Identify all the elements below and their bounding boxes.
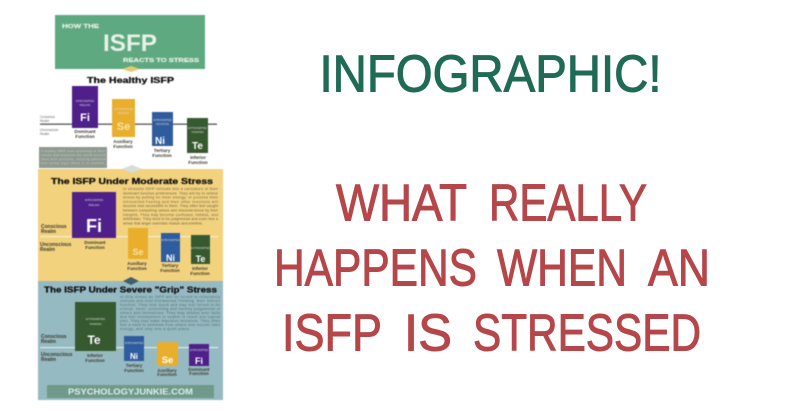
panel: healthy functions (40, 86, 217, 165)
title banner: ISFP (103, 30, 157, 57)
headline: what really happens (274, 174, 710, 362)
text block: grip stress description: energy, and step into a quiet place. (120, 327, 190, 331)
panel: healthy functions: Ni (155, 136, 165, 147)
text block: healthy description: values and explores the world around (41, 153, 105, 157)
panel: moderate stress: Function (160, 268, 180, 273)
panel: healthy functions: Realm (40, 119, 50, 123)
text block: moderate stress description: dominant function preferences. They will try to relieve (123, 191, 218, 195)
panel: healthy functions: INTROVERTED (76, 99, 94, 103)
panel: healthy functions: EXTRAVERTED (188, 126, 207, 130)
text block: grip stress description: others and themselves. They may obsess over facts (120, 311, 220, 315)
heading: The Healthy ISFP: The Healthy ISFP (87, 75, 174, 85)
panel: healthy functions: Function (113, 144, 133, 149)
panel: grip stress: Unconscious (41, 352, 73, 358)
panel: moderate stress: EXTRAVERTED (191, 246, 210, 250)
panel: moderate stress: INTROVERTED (85, 198, 103, 202)
panel: grip stress: Auxiliary (157, 368, 177, 373)
panel: grip stress: Conscious (41, 334, 67, 340)
panel: grip stress: Function (85, 358, 105, 363)
panel: healthy functions: THINKING (191, 130, 204, 134)
panel: moderate stress (38, 165, 223, 281)
panel: grip stress: Se (162, 355, 173, 366)
panel: healthy functions: Dominant (74, 129, 96, 134)
headline: what really happens: ISFP (282, 304, 382, 362)
panel: healthy functions: INTROVERTED (153, 118, 172, 122)
text block: grip stress description (120, 295, 221, 331)
text block: grip stress description: feel a need to withdraw from others and recover their (120, 323, 221, 327)
heading: moderate stress: The ISFP Under Moderate Stress (51, 176, 213, 186)
text block: grip stress description: overuse and trust Extraverted Thinking, their inferior (120, 299, 221, 303)
panel: grip stress: Te (87, 333, 101, 347)
panel: moderate stress: Se (132, 247, 144, 257)
panel: grip stress: EXTRAVERTED (86, 317, 105, 321)
headline: what really happens: STRESSED (473, 304, 701, 362)
panel: moderate stress: Tertiary (162, 263, 179, 268)
text block: grip stress description: plan. They may make impulsive decisions. They often (120, 319, 220, 323)
text block: healthy description: and using logic when it is needed. (41, 161, 105, 165)
panel: grip stress: Dominant (188, 367, 210, 372)
panel: grip stress: THINKING (89, 322, 102, 326)
infographic thumbnail (38, 15, 223, 400)
footer: website banner (47, 385, 214, 398)
marker: banner pointer (122, 66, 140, 72)
text block: grip stress description: and feel incompetent or unable to reach any logical (120, 315, 220, 319)
panel: moderate stress: Function (190, 271, 210, 276)
text block: moderate stress description: insights. They may become confused, listless, and (123, 213, 218, 217)
headline: what really happens: WHEN (497, 238, 627, 296)
panel: moderate stress: Realm (41, 229, 57, 235)
panel: healthy functions: SENSING (118, 111, 129, 115)
headline: what really happens: REALLY (489, 174, 647, 232)
panel: moderate stress: Function (85, 245, 105, 250)
heading: INFOGRAPHIC!: INFOGRAPHIC! (320, 44, 662, 102)
panel: grip stress: Function (124, 368, 144, 373)
panel: grip stress: Tertiary (126, 363, 143, 368)
panel: grip stress: Function (157, 372, 177, 377)
headline: what really happens: AN (648, 238, 710, 296)
panel: healthy functions: INTUITION (156, 122, 169, 126)
panel: grip stress (38, 277, 223, 400)
panel: moderate stress: Conscious (41, 224, 67, 230)
text block: moderate stress description: withdrawn. They tend to be judgmental and even feel a (123, 217, 218, 221)
panel: moderate stress: Ni (166, 253, 175, 263)
marker: section pointer (123, 277, 139, 285)
panel: healthy functions: Function (188, 160, 208, 165)
headline: what really happens: WHAT (336, 174, 467, 232)
panel: moderate stress: Unconscious (40, 242, 72, 248)
panel: healthy functions: Function (152, 153, 172, 158)
panel: healthy functions: Fi (80, 112, 90, 124)
text block: grip stress description: In Grip stress an ISFP will be forced to reluctantly (120, 295, 220, 299)
panel: moderate stress: Inferior (192, 266, 208, 271)
text block: moderate stress description: Introverted Feeling and their other functions will (123, 200, 218, 204)
panel: moderate stress: INTROVERTED (161, 238, 180, 242)
panel: grip stress: Inferior (87, 353, 103, 358)
panel: healthy functions: EXTRAVERTED (114, 107, 133, 111)
panel: healthy functions: Function (75, 134, 95, 139)
panel: grip stress: INTROVERTED (125, 341, 143, 345)
panel: moderate stress: Function (127, 266, 147, 271)
panel: moderate stress: Fi (86, 216, 102, 236)
text block: healthy description (39, 147, 107, 168)
panel: healthy functions: Te (192, 141, 203, 152)
panel: moderate stress: FEELING (88, 203, 100, 207)
footer: website banner: PSYCHOLOGYJUNKIE.COM (68, 386, 193, 396)
text block: moderate stress description (123, 187, 219, 225)
headline: what really happens: IS (404, 304, 452, 362)
text block: moderate stress description: stress by pulling on inner energy, or process their (123, 196, 219, 200)
panel: grip stress: Function (189, 371, 209, 376)
panel: healthy functions: Realm (40, 132, 50, 136)
text block: grip stress description: critical, blunt, controlling and harshly judgmental of (120, 307, 220, 311)
panel: healthy functions: Conscious (40, 115, 55, 119)
panel: moderate stress: Dominant (84, 240, 106, 245)
title banner: REACTS TO STRESS (123, 58, 199, 64)
panel: moderate stress: Auxiliary (127, 261, 147, 266)
heading: grip stress: The ISFP Under Severe "Grip" Stress (44, 284, 217, 294)
text block: moderate stress description: between competing values and misunderstood by their (123, 208, 219, 212)
panel: grip stress: INTROVERTED (190, 348, 208, 352)
panel: grip stress: Realm (41, 339, 57, 345)
panel: healthy functions: Tertiary (154, 148, 171, 153)
text block: grip stress description: function. They lose touch and may feel forced to be (120, 303, 220, 307)
panel: healthy functions: Inferior (190, 155, 206, 160)
title banner (55, 15, 205, 69)
title banner: HOW THE (62, 24, 99, 30)
panel: moderate stress: Realm (40, 247, 56, 253)
text block: healthy description: A healthy ISFP lives according to their (41, 149, 105, 153)
panel: grip stress: Ni (130, 352, 138, 361)
text block: moderate stress description: In stressful ISFP retreats into a caricature of their (123, 187, 219, 191)
panel: healthy functions: Auxiliary (113, 139, 133, 144)
panel: grip stress: Realm (41, 357, 57, 363)
text block: healthy description: them with curiosity, noticing patterns (41, 157, 106, 161)
panel: healthy functions: FEELING (79, 103, 91, 107)
panel: healthy functions: Unconscious (40, 128, 59, 132)
text block: moderate stress description: become less accessible to them. They often feel caught (123, 204, 218, 208)
panel: grip stress: Fi (195, 356, 203, 366)
marker: section pointer (122, 165, 142, 173)
headline: what really happens: HAPPENS (274, 238, 477, 296)
text block: moderate stress description: sense that anger overrides reason and emotion. (123, 221, 203, 225)
panel: moderate stress: Te (196, 254, 205, 264)
panel: healthy functions: Se (117, 121, 130, 133)
